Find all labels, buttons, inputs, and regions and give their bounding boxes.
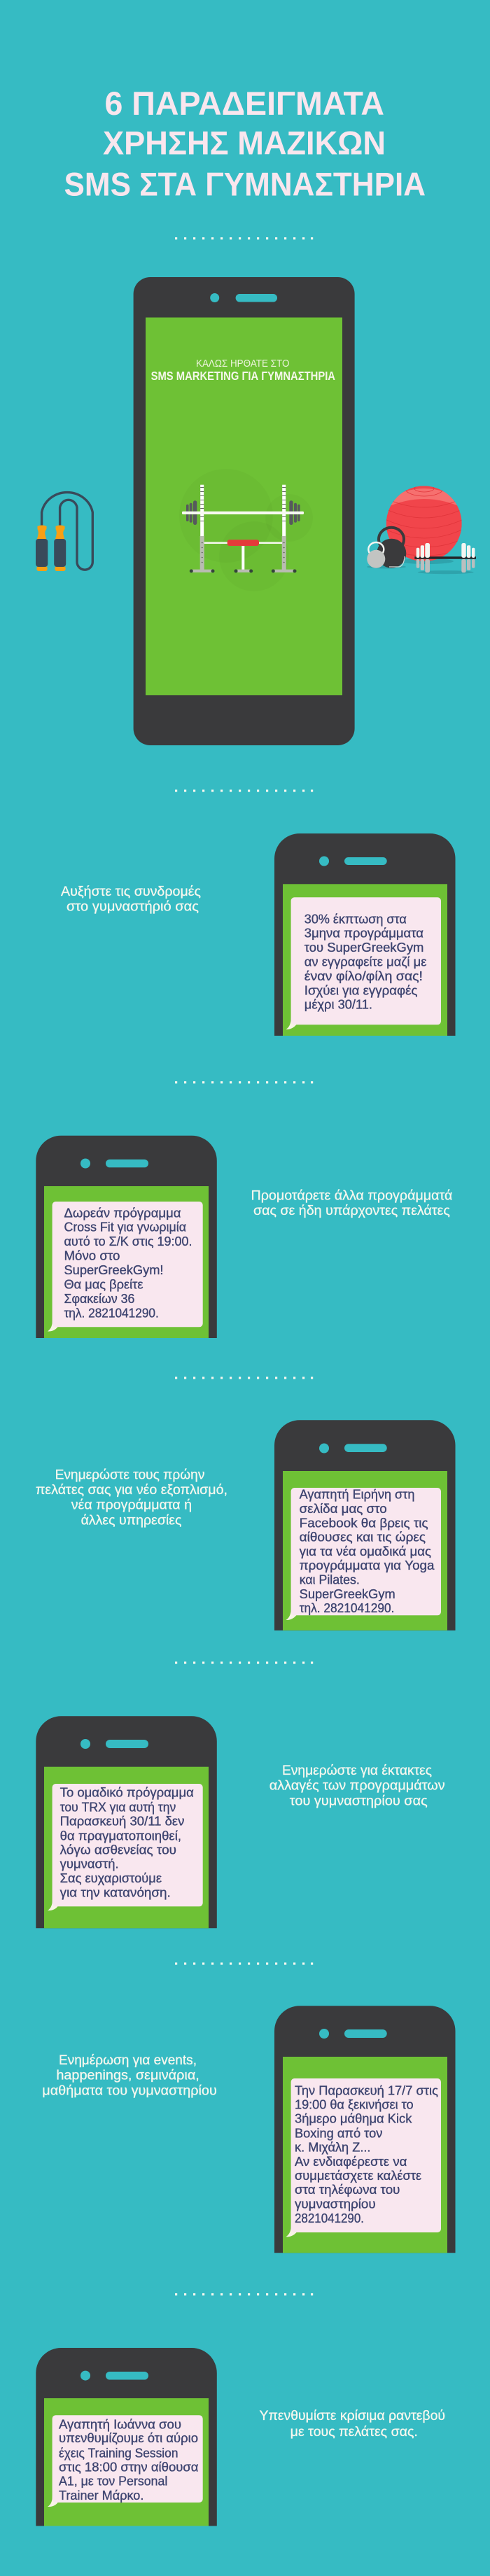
SMS text: Σφακείων 36: [64, 1292, 134, 1306]
SMS text: SuperGreekGym!: [64, 1263, 164, 1277]
SMS text: και Pilates.: [300, 1573, 360, 1587]
SMS text: 3ήμερο μάθημα Kick: [295, 2111, 412, 2125]
SMS text: [295, 2083, 438, 2225]
SMS text: 3μηνα προγράμματα: [304, 927, 424, 941]
section 2 heading: σας σε ήδη υπάρχοντες πελάτες: [253, 1204, 450, 1218]
dumbbell: [414, 556, 476, 559]
SMS text: του TRX για αυτή την: [60, 1800, 176, 1814]
SMS text: Δωρεάν πρόγραμμα: [64, 1206, 181, 1220]
SMS text: τηλ. 2821041290.: [300, 1601, 394, 1615]
section 5 heading: happenings, σεμινάρια,: [56, 2069, 200, 2083]
section 3 heading: άλλες υπηρεσίες: [81, 1513, 181, 1528]
SMS text: θα πραγματοποιηθεί,: [60, 1829, 181, 1843]
welcome text: SMS MARKETING ΓΙΑ ΓΥΜΝΑΣΤΗΡΙΑ: [151, 369, 335, 383]
SMS text: του SuperGreekGym: [304, 941, 424, 955]
SMS text: λόγω ασθενείας του: [60, 1843, 176, 1857]
SMS text: κ. Μιχάλη Ζ...: [295, 2141, 371, 2155]
icon: gym ball, kettlebells and dumbbell: [367, 481, 476, 574]
section 4 heading: αλλαγές των προγραμμάτων: [270, 1779, 445, 1794]
section 6 heading: με τους πελάτες σας.: [290, 2425, 418, 2440]
SMS text: έχεις Training Session: [59, 2446, 178, 2460]
title: [64, 85, 426, 202]
kettlebells: [379, 528, 404, 551]
SMS text: 30% έκπτωση στα: [304, 912, 407, 926]
section 3 phone: [274, 1420, 455, 1631]
SMS text: στα τηλέφωνα του: [295, 2183, 400, 2197]
SMS text: γυμναστή.: [60, 1857, 119, 1871]
SMS text: Αγαπητή Ειρήνη στη: [300, 1488, 414, 1502]
SMS text: 19:00 θα ξεκινήσει το: [295, 2097, 414, 2111]
section 5 heading: μαθήματα του γυμναστηρίου: [42, 2083, 217, 2098]
section 2 heading: [251, 1188, 452, 1218]
SMS text: [300, 1488, 435, 1615]
title: ΧΡΗΣΗΣ ΜΑΖΙΚΩΝ: [103, 125, 386, 162]
SMS text: Παρασκευή 30/11 δεν: [60, 1815, 184, 1829]
section 1 phone: [274, 833, 455, 1036]
section 4 heading: του γυμναστηρίου σας: [290, 1794, 428, 1808]
welcome text: ΚΑΛΩΣ ΗΡΘΑΤΕ ΣΤΟ: [196, 358, 289, 369]
SMS text: Αν ενδιαφέρεστε να: [295, 2155, 407, 2169]
SMS text: Boxing από τον: [295, 2126, 382, 2140]
section 2 phone: [36, 1136, 217, 1338]
section 1 heading: Αυξήστε τις συνδρομές: [61, 885, 201, 899]
SMS text: αν εγγραφείτε μαζί με: [304, 955, 426, 969]
SMS text: σελίδα μας στο: [300, 1502, 387, 1516]
section 4 heading: Ενημερώστε για έκτακτες: [282, 1764, 432, 1778]
section 5 heading: [42, 2053, 217, 2098]
section 4 phone: [36, 1716, 217, 1928]
SMS text: έναν φίλο/φίλη σας!: [304, 969, 423, 983]
icon: weight bench: [179, 469, 313, 591]
SMS text: [304, 912, 426, 1012]
SMS text: αυτό το Σ/Κ στις 19:00.: [64, 1234, 192, 1248]
SMS text: SuperGreekGym: [300, 1587, 396, 1601]
icon: jump rope: [36, 493, 92, 571]
section 5 heading: Ενημέρωση για events,: [59, 2053, 197, 2068]
section 3 heading: πελάτες σας για νέο εξοπλισμό,: [36, 1483, 227, 1498]
SMS text: Cross Fit για γνωριμία: [64, 1220, 186, 1234]
SMS text: Facebook θα βρεις τις: [300, 1516, 428, 1530]
SMS text: Την Παρασκευή 17/7 στις: [295, 2083, 438, 2097]
gym ball: [385, 481, 463, 561]
SMS text: προγράμματα για Yoga: [300, 1558, 435, 1572]
SMS text: Αγαπητή Ιωάννα σου: [59, 2417, 181, 2431]
section 5 phone: [274, 2006, 455, 2253]
SMS text: Το ομαδικό πρόγραμμα: [60, 1785, 194, 1799]
SMS text: [59, 2417, 199, 2503]
SMS text: για τα νέα ομαδικά μας: [300, 1544, 431, 1558]
SMS text: 2821041290.: [295, 2211, 364, 2225]
section 2 heading: Προμοτάρετε άλλα προγράμματά: [251, 1188, 452, 1203]
title: 6 ΠΑΡΑΔΕΙΓΜΑΤΑ: [105, 85, 384, 122]
section 3 heading: [36, 1468, 227, 1528]
SMS text: στις 18:00 στην αίθουσα: [59, 2461, 199, 2475]
SMS text: υπενθυμίζουμε ότι αύριο: [59, 2431, 198, 2445]
SMS text: Α1, με τον Personal: [59, 2474, 167, 2488]
SMS text: αίθουσες και τις ώρες: [300, 1530, 426, 1544]
section 6 heading: [259, 2409, 445, 2440]
welcome text: [151, 358, 335, 383]
section 1 heading: στο γυμναστήριό σας: [66, 900, 199, 915]
section 6 phone: [36, 2348, 217, 2526]
section 3 heading: νέα προγράμματα ή: [71, 1498, 192, 1513]
SMS text: Θα μας βρείτε: [64, 1277, 143, 1291]
SMS text: Σας ευχαριστούμε: [60, 1871, 162, 1885]
title: SMS ΣΤΑ ΓΥΜΝΑΣΤΗΡΙΑ: [64, 165, 426, 202]
SMS text: μέχρι 30/11.: [304, 998, 372, 1012]
SMS text: συμμετάσχετε καλέστε: [295, 2169, 421, 2183]
SMS text: τηλ. 2821041290.: [64, 1306, 159, 1320]
section 3 heading: Ενημερώστε τους πρώην: [55, 1468, 204, 1482]
main phone: [134, 277, 355, 745]
SMS text: γυμναστηρίου: [295, 2197, 376, 2211]
section 1 heading: [61, 885, 201, 915]
SMS text: [64, 1206, 192, 1320]
SMS text: Μόνο στο: [64, 1249, 120, 1263]
section 6 heading: Υπενθυμίστε κρίσιμα ραντεβού: [259, 2409, 445, 2423]
SMS text: Ισχύει για εγγραφές: [304, 983, 418, 997]
SMS text: [60, 1785, 194, 1899]
section 4 heading: [270, 1764, 445, 1808]
SMS text: για την κατανόηση.: [60, 1885, 171, 1899]
SMS text: Trainer Μάρκο.: [59, 2489, 144, 2503]
